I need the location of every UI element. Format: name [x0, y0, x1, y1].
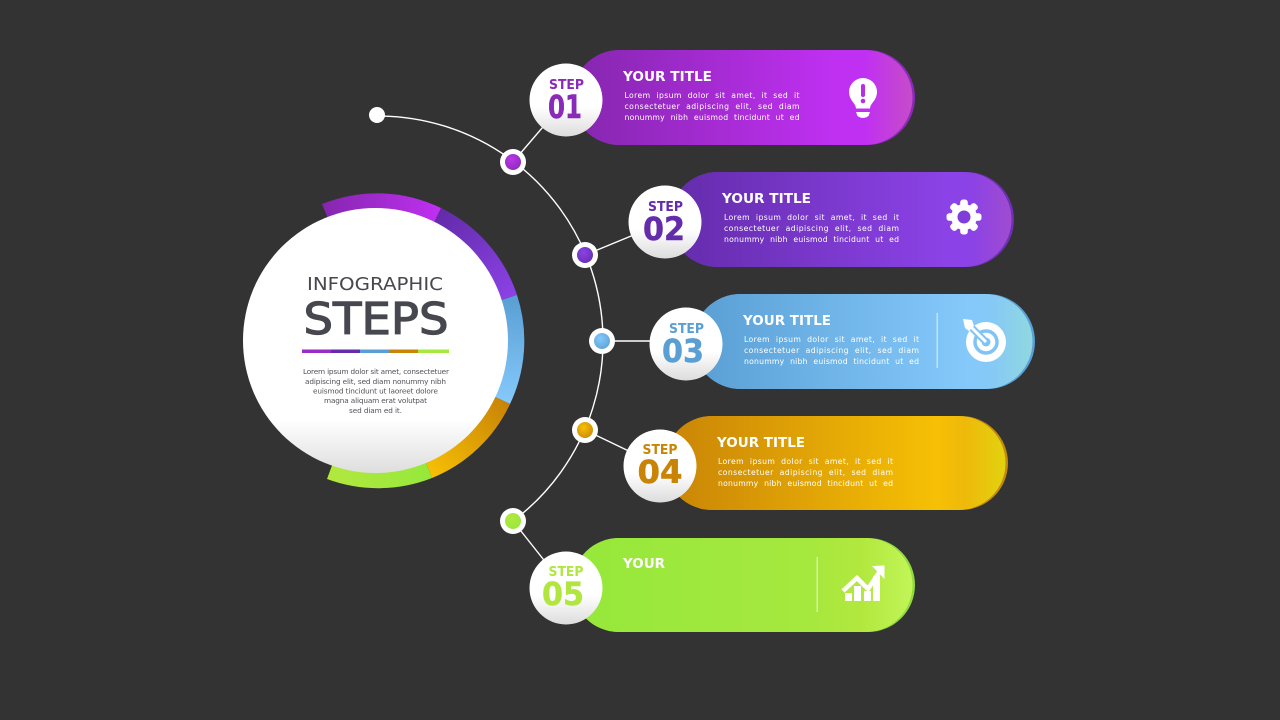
step 3 title: YOUR TITLE — [742, 313, 831, 329]
start dot — [369, 107, 385, 123]
step 2 badge: 02 — [643, 210, 685, 248]
connector arc — [377, 100, 686, 588]
step 1 text: Lorem ipsum dolor sit amet, it sed it — [624, 91, 800, 100]
panel: step 1 — [572, 50, 915, 145]
step 3 text: consectetuer adipiscing elit, sed diam — [744, 346, 919, 355]
node 1 — [500, 149, 526, 175]
icon: gear — [946, 200, 982, 234]
step 2 badge: STEP — [648, 199, 683, 215]
step 5 badge — [530, 552, 602, 624]
panel: step 5 — [572, 538, 915, 632]
step 2 text: consectetuer adipiscing elit, sed diam — [724, 224, 899, 233]
panel: step 3 — [693, 294, 1035, 389]
step 4 title: YOUR TITLE — [716, 435, 805, 451]
hub description — [303, 367, 449, 415]
node 4 — [572, 417, 598, 443]
step 3 badge: 03 — [662, 332, 704, 370]
step 2 badge — [628, 186, 702, 258]
step 3 badge — [650, 308, 722, 380]
step 4 badge: 04 — [638, 453, 682, 491]
step 5 badge: STEP — [548, 564, 584, 580]
step 2 text — [724, 213, 899, 244]
panel: step 2 — [670, 172, 1014, 267]
icon: target — [963, 319, 1006, 362]
step 4 badge — [624, 430, 696, 502]
step 1 badge: 01 — [548, 88, 582, 126]
step 4 text — [718, 457, 893, 488]
step 4 badge: STEP — [642, 442, 678, 458]
hub description: sed diam ed it. — [349, 406, 402, 415]
step 3 divider — [936, 313, 938, 368]
step 2 title: YOUR TITLE — [721, 191, 811, 207]
step 1 badge — [530, 64, 602, 136]
hub colour bar — [302, 350, 449, 353]
step 1 text: nonummy nibh euismod tincidunt ut ed — [624, 113, 800, 122]
step 1 badge: STEP — [549, 77, 584, 93]
node 2 — [572, 242, 598, 268]
icon: growth chart — [843, 566, 884, 601]
step 5 badge: 05 — [542, 575, 584, 613]
step 2 text: Lorem ipsum dolor sit amet, it sed it — [724, 213, 899, 222]
panel: step 4 — [665, 416, 1008, 510]
step 5 divider — [816, 557, 818, 612]
step 1 text: consectetuer adipiscing elit, sed diam — [624, 102, 800, 111]
step 1 title: YOUR TITLE — [622, 69, 712, 85]
step 1 text — [624, 91, 800, 122]
hub circle — [243, 208, 508, 473]
step 2 text: nonummy nibh euismod tincidunt ut ed — [724, 235, 899, 244]
step 5 title: YOUR — [622, 556, 666, 572]
hub description: magna aliquam erat volutpat — [324, 396, 427, 405]
node 3 — [589, 328, 615, 354]
hub description: euismod tincidunt ut laoreet dolore — [313, 386, 438, 396]
hub description: adipiscing elit, sed diam nonummy nibh — [305, 377, 446, 386]
hub title: STEPS — [304, 294, 448, 345]
hub ring — [322, 193, 524, 488]
icon: light bulb — [849, 78, 877, 118]
step 4 text: Lorem ipsum dolor sit amet, it sed it — [718, 457, 893, 466]
step 3 text — [744, 335, 919, 366]
step 4 text: nonummy nibh euismod tincidunt ut ed — [718, 479, 893, 488]
step 4 text: consectetuer adipiscing elit, sed diam — [718, 468, 893, 477]
step 3 badge: STEP — [669, 321, 704, 337]
step 3 text: nonummy nibh euismod tincidunt ut ed — [744, 357, 919, 366]
node 5 — [500, 508, 526, 534]
hub description: Lorem ipsum dolor sit amet, consectetuer — [303, 367, 449, 376]
hub heading: INFOGRAPHIC — [307, 275, 443, 295]
step 3 text: Lorem ipsum dolor sit amet, it sed it — [744, 335, 919, 344]
